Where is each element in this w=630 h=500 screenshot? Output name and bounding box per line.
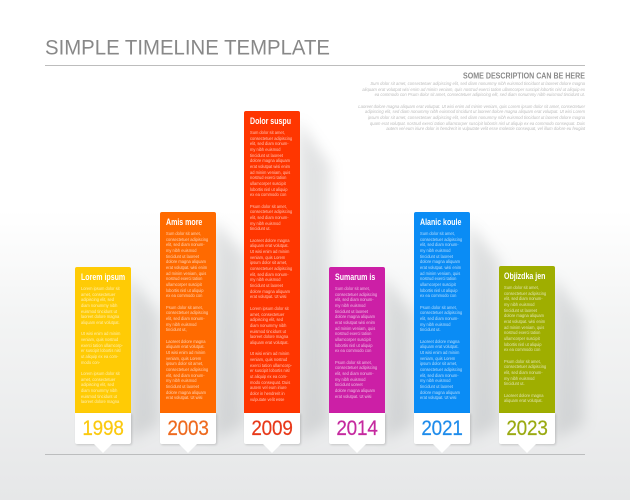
text: 2003 body: consectetuer adipiscing — [166, 237, 208, 242]
description text: quam erat volutpat. nostrud exerci tation ullamcorper suscipit lobortis nisl ut aliquip ex ea commodo consequat. Duis — [370, 121, 585, 126]
text: 2023 body: consectetuer adipiscing — [504, 364, 546, 369]
text: 2003 body: aliquam erat volutpat. — [166, 344, 204, 349]
year card: 2003: 2003 — [167, 417, 209, 440]
text: 2003 body: my nibh euismod — [166, 248, 196, 253]
description text: adipiscing elit, sed diam nonummy nibh euismod tincidunt ut laoreet dolore magna aliquam erat volutpat. Ut wisi Lorem — [365, 109, 585, 114]
text: 2021 body: tincidunt ut laoreet — [420, 384, 453, 389]
text: 2014 body: dolore magna aliquam — [334, 314, 375, 319]
text: 2003 body: nostrud exerci tation — [166, 276, 202, 281]
description text: ipsum dolor sit amet, consectetuer adipiscing elit, sed diam nonummy nibh euismod tincidunt ut laoreet dolore magna — [368, 115, 585, 120]
pointer — [94, 444, 112, 453]
text: 2021 body: elit, sed diam nonum- — [420, 373, 458, 378]
year card: 2003 — [160, 413, 216, 444]
text: 2023 body: tincidunt ut laoreet — [504, 308, 537, 313]
heading: Alanic koule: Alanic koule — [420, 216, 461, 227]
text: 2009 body: Sum dolor sit amet, — [250, 130, 284, 135]
text: 2003 body: lobortis nisl ut aliquip — [166, 288, 203, 293]
year card: 1998 — [75, 413, 131, 444]
text: 2021 body: elit, sed diam nonum- — [420, 242, 458, 247]
text: 1998 body: laoreet dolore magna — [80, 399, 119, 404]
text: 2009 body: elit, sed diam nonum- — [250, 141, 288, 146]
panel: 2009 — [244, 111, 302, 453]
text: 2021 body: tincidunt ut. — [420, 327, 440, 332]
text: 2003 body: Psum dolor sit amet, — [166, 305, 202, 310]
text: 2003 body: dolore magna aliquam — [166, 259, 206, 264]
text: 2009 body: ut aliquip ex ea com- — [250, 374, 287, 379]
heading: Objizdka jen: Objizdka jen — [504, 270, 545, 281]
text: 2021 body: dolore magna aliquam — [420, 259, 460, 264]
text: 2014 body: consectetuer adipiscing — [334, 365, 377, 370]
text: 2003 body: Sum dolor sit amet, — [166, 231, 200, 236]
text: 2009 body: diam nonummy nibh — [250, 323, 286, 328]
text: 2021 body: veniam, quis Lorem — [420, 356, 455, 361]
text: 2003 body: veniam, quis Lorem — [166, 356, 201, 361]
text: 2021 body: erat volutpat. wisi enim — [420, 265, 461, 270]
text: 2021 body: ex ea commodo con — [420, 293, 456, 298]
text: 2009 body: my nibh euismod — [250, 147, 280, 152]
text: 2021 body: ad minim veniam, quis — [420, 271, 460, 276]
year card: 1998: 1998 — [82, 417, 124, 440]
text: 2023 body: my nibh euismod — [504, 302, 535, 307]
text: 2023 body: nostrud exerci tation — [504, 330, 540, 335]
text: 2014 body: lobortis nisl ut aliquip — [334, 343, 372, 348]
text: 2014 body: tincidunt uoreet — [334, 382, 362, 387]
text: 2023 body: Sum dolor sit amet, — [504, 285, 539, 290]
text: 2014 body: ex ea commodo con — [334, 348, 371, 353]
title: SIMPLE TIMELINE TEMPLATE — [45, 36, 330, 60]
text: 2009 body: Laoreet dolore magna — [250, 238, 289, 243]
text: 2003 body: consectetuer adipiscing — [166, 367, 208, 372]
text: 2003 body: ex ea commodo con — [166, 293, 202, 298]
text: 2014 body: Sum dolor sit amet, — [334, 286, 369, 291]
panel: 2021 — [414, 212, 472, 453]
text: 2009 body: Ut wisi enim ad minim — [250, 249, 289, 254]
panel: 1998 — [75, 267, 133, 453]
text: 2009 body: my nibh euismod — [250, 221, 280, 226]
text: 2021 body: my nibh euismod — [420, 378, 450, 383]
text: 2009 body: dolor in hendrerit in — [250, 391, 284, 396]
text: 2003 body: ipsum dolor sit amet, — [166, 361, 203, 366]
text: 2023 body: ex ea commodo con — [504, 347, 540, 352]
description text: Laoreet dolore magna aliquam erat volutpat. Ut wisi enim ad minim veniam, quis Lorem ipsum dolor sit amet, consectetuer — [358, 104, 585, 109]
text: 2009 body: Ut wisi enim ad minim — [250, 351, 289, 356]
text: 2009 body: modo consequat. Duis — [250, 380, 290, 385]
text: 2009 body: ipsum dolor sit amet, — [250, 260, 287, 265]
pointer — [518, 444, 536, 453]
text: 2014 body: my nibh euismod — [334, 377, 365, 382]
text: 2014 body: my nibh euismod — [334, 303, 365, 308]
text: 2009 body: dolore magna aliquam — [250, 158, 290, 163]
text: 2021 body — [420, 231, 462, 400]
text: 1998 body: adipiscing elit, sed — [80, 297, 114, 302]
text: 2021 body: consectetuer adipiscing — [420, 310, 462, 315]
text: 2021 body: Ut wisi enim ad minim — [420, 350, 459, 355]
text: 1998 body: Lorem ipsum dolor sit — [80, 371, 119, 376]
pointer — [263, 444, 281, 453]
text: 2009 body: elit, sed diam nonum- — [250, 215, 288, 220]
text: 2003 body: dolore magna aliquam — [166, 390, 206, 395]
text: 2009 body: exerci tation ullamcorp- — [250, 363, 291, 368]
text: 2014 body: dolore magna aliquam — [334, 388, 375, 393]
text: 2021 body: nostrud exerci tation — [420, 276, 456, 281]
text: 2021 body: ipsum dolor sit amet, — [420, 361, 457, 366]
text: 2023 body: dolore magna aliquam — [504, 313, 544, 318]
text: 1998 body: amet, consectetuer — [80, 292, 115, 297]
text: 2021 body: Laoreet dolore magna — [420, 339, 459, 344]
text: 1998 body: aliquam erat volutpat. — [80, 320, 119, 325]
pointer — [433, 444, 451, 453]
description text: autem vel eum iriure dolor in hendrerit in vulputate velit esse molestie consequat, vel illum dolore eu feugiat — [386, 126, 585, 131]
text: 1998 body: er suscipit lobortis nisl — [80, 348, 120, 353]
text: 2014 body: elit, sed diam nonum- — [334, 371, 373, 376]
text: 2009 body: tincidunt ut laoreet — [250, 283, 283, 288]
text: 2023 body: ullamcorper suscipit — [504, 336, 540, 341]
text: 1998 body: Lorem ipsum dolor sit — [80, 286, 119, 291]
year card: 2023: 2023 — [506, 417, 547, 440]
year card: 2021: 2021 — [421, 417, 463, 440]
text: 2014 body: ullamcorper suscipit — [334, 337, 370, 342]
text: 2021 body: ullamcorper suscipit — [420, 282, 455, 287]
text: 2009 body: my nibh euismod — [250, 277, 280, 282]
text: 2021 body: aliquam erat volutpat. — [420, 344, 458, 349]
text: 2003 body: Ut wisi enim ad minim — [166, 350, 205, 355]
text: 2014 body: Psum dolor sit amet, — [334, 360, 371, 365]
text: 2014 body: ad minim veniam, quis — [334, 326, 375, 331]
description text: aliquam erat volutpat wisi enim ad minim veniam, quis nostrud exerci tation ullamcorper suscipit lobortis nisl ut aliquip ex — [362, 87, 585, 92]
text: 1998 body: adipiscing elit, sed — [80, 382, 114, 387]
text: 1998 body: euismod tincidunt ut — [80, 394, 116, 399]
text: 2003 body: tincidunt ut, — [166, 327, 186, 332]
description text — [358, 81, 586, 131]
text: 2021 body: consectetuer adipiscing — [420, 367, 462, 372]
pointer — [348, 444, 366, 453]
text: 2009 body: er suscipit lobortis nisl — [250, 368, 289, 373]
text: 1998 body: diam nonummy nibh — [80, 303, 117, 308]
text: 2009 body: dolore magna aliquam — [250, 289, 290, 294]
text: 2023 body — [504, 285, 546, 403]
text: 2021 body: my nibh euismod — [420, 248, 450, 253]
text: 2009 body: consectetuer adipiscing — [250, 266, 292, 271]
text: 2003 body: erat volutpat. wisi enim — [166, 265, 207, 270]
text: 2023 body: consectetuer adipiscing — [504, 291, 546, 296]
text: 2014 body — [334, 286, 377, 399]
panel: 2003 — [160, 212, 218, 453]
text: 2009 body: consectetuer adipiscing — [250, 136, 292, 141]
text: 2014 body: elit, sed diam nonum- — [334, 297, 373, 302]
text: 2023 body: lobortis nisl ut aliquip — [504, 342, 542, 347]
text: 2023 body: erat volutpat. wisi enim — [504, 319, 545, 324]
text: 2023 body: tincidunt ut. — [504, 381, 525, 386]
text: 1998 body — [80, 286, 123, 404]
text: 2009 body: nostrud exerci tation — [250, 175, 286, 180]
text: 2003 body: consectetuer adipiscing — [166, 310, 208, 315]
text: 1998 body: euismod tincidunt ut — [80, 309, 116, 314]
text: 2009 body: ad minim veniam, quis — [250, 170, 290, 175]
text: 2014 body: erat volutpat. Ut wisi — [334, 394, 371, 399]
text: 2009 body: elit, sed diam nonum- — [250, 272, 288, 277]
text: 2009 body: euismod tincidunt ut — [250, 329, 285, 334]
text: 2009 body: ullamcorper suscipit — [250, 181, 285, 186]
panel: 2023 — [499, 266, 557, 453]
text: 2021 body: consectetuer adipiscing — [420, 237, 462, 242]
text: 2021 body: elit, sed diam nonum- — [420, 316, 458, 321]
year card: 2014: 2014 — [336, 417, 378, 440]
text: 2003 body: my nibh euismod — [166, 322, 196, 327]
text: 2009 body: ex ea commodo con — [250, 192, 286, 197]
text: 2009 body: tincidunt ut laoreet — [250, 153, 283, 158]
text: 2009 body: aliquam erat volutpat. — [250, 243, 288, 248]
text: 2009 body: veniam, quis nostrud — [250, 357, 287, 362]
text: 1998 body: veniam, quis nostrud — [80, 337, 118, 342]
year card: 2009: 2009 — [251, 417, 293, 440]
text: 2009 body: autem vel eum iriure — [250, 385, 286, 390]
text: 2023 body: elit, sed diam nonum- — [504, 296, 543, 301]
text: 2014 body: nostrud exerci tation — [334, 331, 371, 336]
text: 2003 body: Laoreet dolore magna — [166, 339, 205, 344]
text: 2009 body: Psum dolor sit amet, — [250, 204, 286, 209]
text: 2023 body: Psum dolor sit amet, — [504, 359, 541, 364]
text: 2023 body: Laoreet dolore magna — [504, 393, 544, 398]
text: 2021 body: erat volutpat. Ut wisi — [420, 395, 456, 400]
text: 2009 body: adipiscing elit, sed — [250, 317, 283, 322]
text: 2014 body: tincidunt ut laoreet — [334, 309, 368, 314]
text: 1998 body: amet, consectetuer — [80, 377, 115, 382]
text: 2003 body: tincidunt ut laoreet — [166, 384, 199, 389]
text: 2009 body: lobortis nisl ut aliquip — [250, 187, 287, 192]
text: 2021 body: tincidunt ut laoreet — [420, 254, 453, 259]
text: 2003 body: ad minim veniam, quis — [166, 271, 206, 276]
text: 2009 body: tincidunt ut. — [250, 226, 270, 231]
text: 1998 body: Ut wisi enim ad minim — [80, 331, 120, 336]
text: 2009 body: laoreet dolore magna — [250, 334, 288, 339]
text: 2009 body: erat volutpat. Ut wisi — [250, 294, 286, 299]
pointer — [179, 444, 197, 453]
heading: Amis more: Amis more — [166, 216, 202, 227]
text: 2009 body: consectetuer adipiscing — [250, 209, 292, 214]
text: 1998 body: laoreet dolore magna — [80, 314, 119, 319]
text: 2021 body: my nibh euismod — [420, 322, 450, 327]
text: 2009 body: amet, consectetuer — [250, 312, 284, 316]
year card: 2021 — [414, 413, 470, 444]
heading: Lorem ipsum: Lorem ipsum — [80, 271, 125, 282]
description text: ea commodo con Psum dolor sit amet, consectetuer adipiscing elit, sed diam nonummy nibh euismod tincidunt ut. — [375, 92, 585, 97]
text: 2014 body: consectetuer adipiscing — [334, 292, 377, 297]
text: 2003 body: my nibh euismod — [166, 378, 196, 383]
text: 2009 body: aliquam erat volutpat. — [250, 340, 288, 345]
text: 1998 body: diam nonummy nibh — [80, 388, 117, 393]
text: 2009 body — [250, 130, 292, 402]
year card: 2014 — [329, 413, 385, 444]
text: 2021 body: lobortis nisl ut aliquip — [420, 288, 457, 293]
text: 2009 body: vulputate velit esse — [250, 397, 284, 402]
heading: Sumarum is: Sumarum is — [334, 271, 375, 282]
description text: Sum dolor sit amet, consectetuer adipiscing elit, sed diam nonummy nibh euismod tincidunt ut laoreet dolore magna — [370, 81, 585, 86]
text: 1998 body: modo con- — [80, 360, 100, 365]
text: 1998 body: exerci tation ullamcorp- — [80, 343, 122, 348]
text: 2014 body: erat volutpat wisi enim — [334, 320, 374, 325]
text: 2003 body — [166, 231, 208, 400]
text: 2003 body: ullamcorper suscipit — [166, 282, 201, 287]
text: 2003 body: elit, sed diam nonum- — [166, 242, 204, 247]
text: 1998 body: ut aliquip ex ea com- — [80, 354, 118, 359]
text: 2003 body: tincidunt ut laoreet — [166, 254, 199, 259]
text: 2003 body: elit, sed diam nonum- — [166, 373, 204, 378]
text: 2023 body: aliquam erat volutpat. — [504, 398, 543, 403]
text: 2021 body: Sum dolor sit amet, — [420, 231, 454, 236]
text: 2003 body: elit, sed diam nonum- — [166, 316, 204, 321]
text: 2003 body: erat volutpat. Ut wisi — [166, 395, 202, 400]
text: 2009 body: veniam, quis Lorem — [250, 255, 285, 260]
panel: 2014 — [329, 267, 387, 453]
year card: 2009 — [244, 413, 300, 444]
text: 2021 body: Psum dolor sit amet, — [420, 305, 456, 310]
text: 2021 body: dolore magna aliquam — [420, 390, 460, 395]
text: 2009 body: erat volutpat wisi enim — [250, 164, 289, 169]
text: 2023 body: ad minim veniam, quis — [504, 325, 544, 330]
text: 2023 body: elit, sed diam nonum- — [504, 370, 543, 375]
text: 2023 body: my nibh euismod — [504, 376, 535, 381]
year card: 2023 — [498, 413, 554, 444]
heading: Dolor suspu: Dolor suspu — [250, 115, 291, 126]
text: 2009 body: Lorem ipsum dolor sit — [250, 306, 288, 311]
